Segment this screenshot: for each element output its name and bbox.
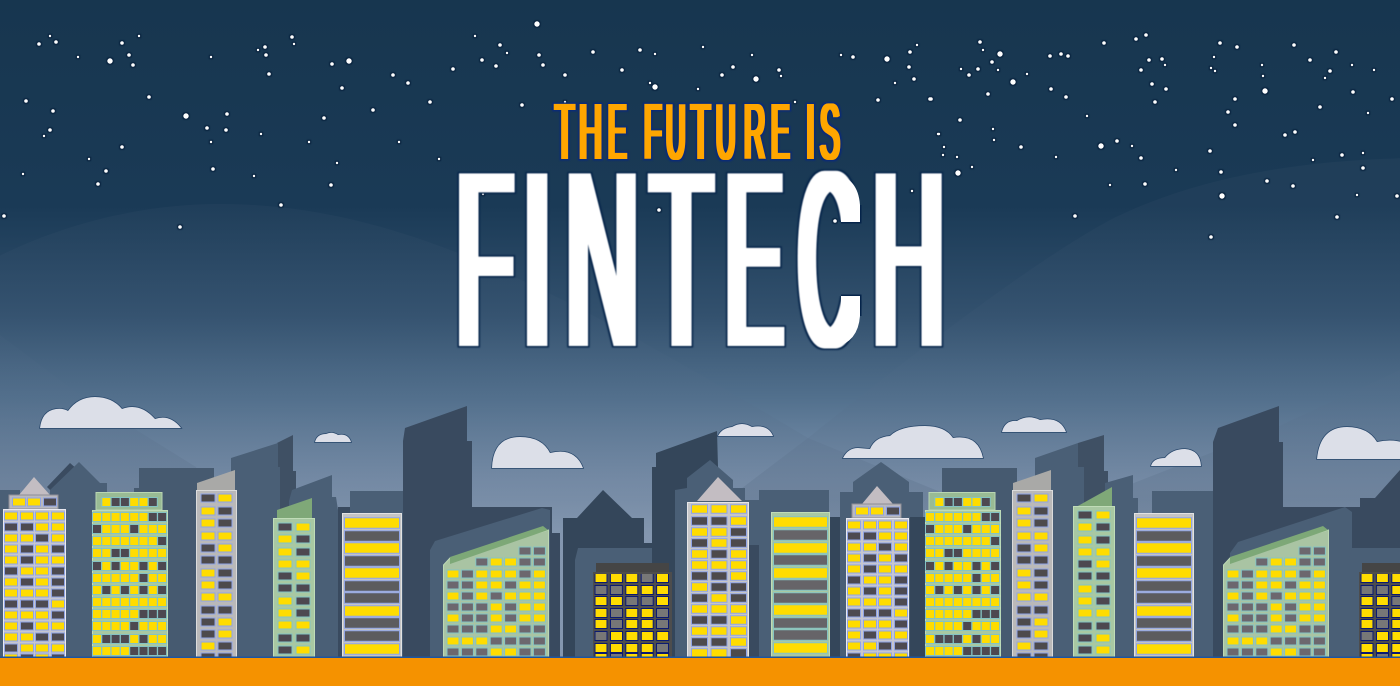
back skyline silhouettes	[0, 406, 1400, 660]
clouds	[40, 397, 1400, 468]
main title: FINTECH	[456, 120, 945, 400]
subtitle: THE FUTURE IS: S	[820, 87, 839, 176]
tower: grey striped, left	[342, 514, 402, 664]
tower: green narrow, left	[274, 498, 314, 676]
main title: FINTECH: N	[566, 120, 638, 400]
subtitle: THE FUTURE IS: T	[691, 87, 711, 176]
subtitle: THE FUTURE IS: T	[555, 87, 575, 176]
subtitle: THE FUTURE IS: H	[579, 87, 603, 176]
ground strip	[0, 656, 1400, 686]
building: dark with lit windows, far right	[1359, 563, 1400, 664]
subtitle: THE FUTURE IS: R	[744, 87, 765, 176]
main title: FINTECH: C	[799, 120, 858, 400]
tower: grey pointed, centre right	[846, 486, 908, 673]
tower: green striped, centre	[772, 512, 830, 664]
subtitle: THE FUTURE IS	[552, 87, 842, 176]
faint hills in the sky	[0, 158, 1400, 686]
tower: grey narrow, left	[196, 470, 236, 664]
tower: grey striped, right	[1134, 514, 1194, 664]
building: green slanted, left	[444, 526, 548, 664]
main title: FINTECH: T	[651, 120, 713, 400]
tower: green eight-column, left	[92, 492, 168, 664]
tower: green eight-column, right	[926, 492, 1000, 664]
tower: grey narrow, right	[1012, 470, 1052, 664]
building: green slanted, right	[1224, 526, 1328, 664]
tower: grey pointed, left	[4, 477, 66, 664]
stars	[4, 24, 1397, 237]
main title: FINTECH: H	[873, 120, 945, 400]
subtitle: THE FUTURE IS: U	[666, 87, 685, 176]
subtitle: THE FUTURE IS: E	[608, 87, 626, 176]
subtitle: THE FUTURE IS: I	[806, 87, 815, 176]
main title: FINTECH: I	[523, 120, 551, 400]
main title: FINTECH: F	[456, 120, 512, 400]
main title: FINTECH: E	[726, 120, 783, 400]
subtitle: THE FUTURE IS: F	[644, 87, 661, 176]
tower: grey pointed, centre	[688, 477, 748, 664]
subtitle: THE FUTURE IS: E	[771, 87, 789, 176]
subtitle: THE FUTURE IS: U	[716, 87, 735, 176]
tower: green narrow, right	[1074, 487, 1114, 664]
title detail: squared terminals of the letter C	[840, 180, 862, 344]
building: dark with lit windows, centre	[593, 563, 672, 664]
